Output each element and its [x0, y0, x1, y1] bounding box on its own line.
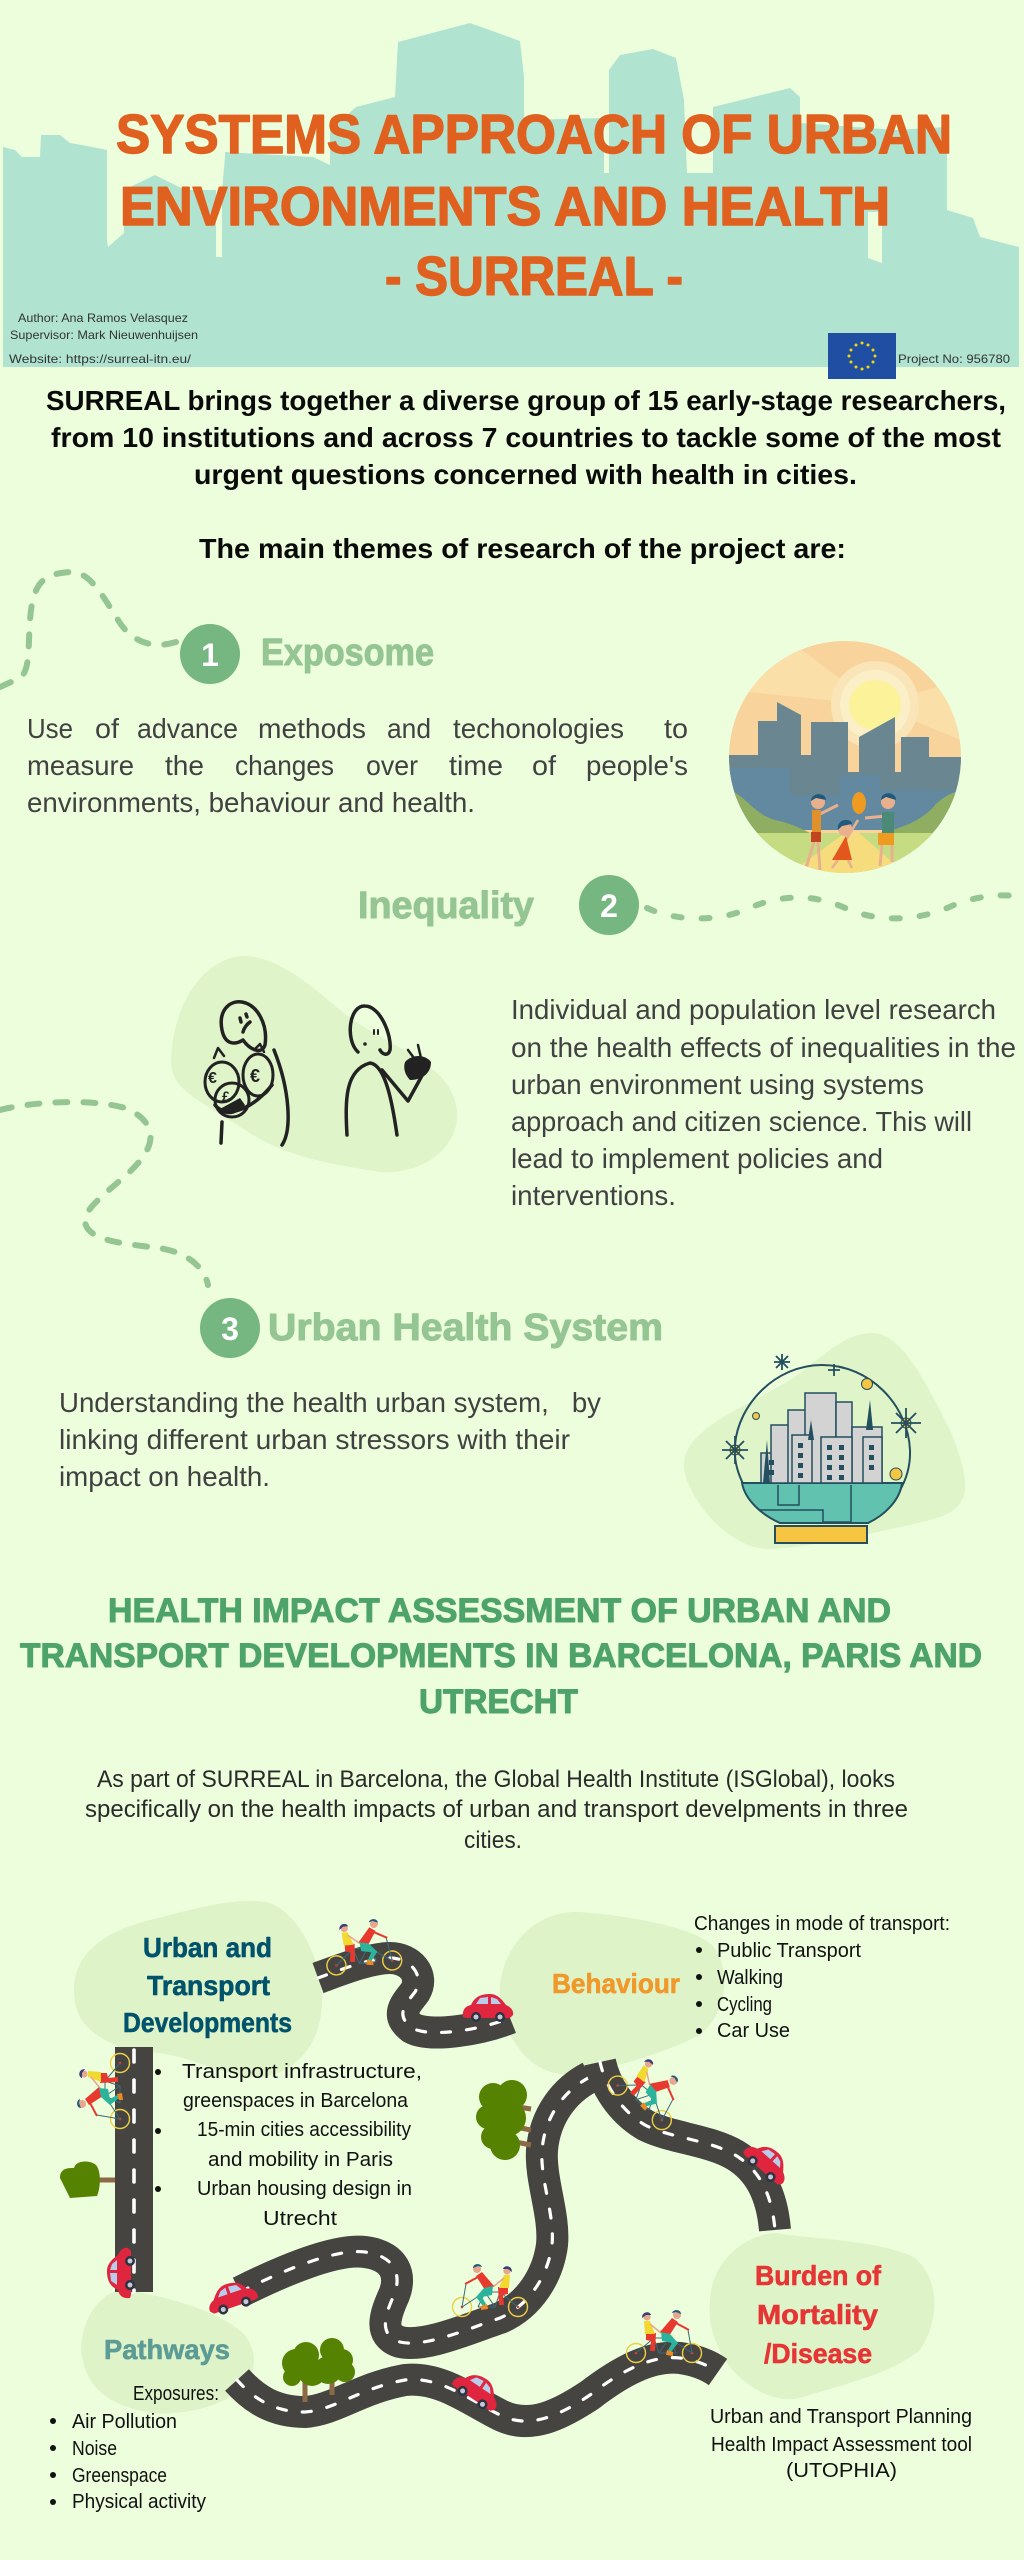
urban health description: linking different urban stressors with their: [59, 1424, 570, 1455]
list: exposures: Exposures:: [133, 2383, 219, 2405]
exposome description: [27, 713, 688, 818]
skyline silhouette: [3, 23, 1019, 367]
node label: urban and transport developments: Urban and: [143, 1932, 272, 1963]
exposome description: environments, behaviour and health.: [27, 787, 475, 818]
node blob: urban and transport developments: [74, 1901, 322, 2077]
list: exposures: [50, 2383, 219, 2513]
caption: UTOPHIA tool: [710, 2406, 972, 2482]
caption: UTOPHIA tool: Urban and Transport Planning: [710, 2406, 972, 2428]
node blob: behaviour: [500, 1912, 724, 2075]
list: developments: greenspaces in Barcelona: [183, 2090, 409, 2112]
dashed connector to theme 1: [0, 572, 176, 687]
inequality description: Individual and population level research: [511, 994, 996, 1025]
author credits: Supervisor: Mark Nieuwenhuijsen: [10, 328, 198, 342]
title: SYSTEMS APPROACH OF URBAN: [116, 103, 952, 165]
dashed connector to theme 3: [0, 1102, 208, 1285]
number badge 3: [200, 1298, 260, 1358]
list: exposures: Greenspace: [72, 2465, 167, 2487]
inequality description: urban environment using systems: [511, 1069, 924, 1100]
list: modes of transport: Car Use: [717, 2020, 790, 2042]
exposome description: the: [165, 750, 204, 781]
node label: burden of mortality / disease: /Disease: [764, 2338, 872, 2369]
exposome description: to: [664, 713, 688, 744]
illustration: person with many money bags: [205, 1002, 288, 1145]
heading: inequality: Inequality: [358, 885, 534, 927]
icon: car right road: [740, 2135, 796, 2190]
node label: burden of mortality / disease: Burden of: [755, 2260, 882, 2291]
illustration: person with many money bags: €: [208, 1070, 217, 1087]
heading: health impact assessment: HEALTH IMPACT ASSESSMENT OF URBAN AND: [108, 1592, 891, 1630]
intro text block: urgent questions concerned with health in cities.: [194, 459, 857, 490]
exposome description: changes: [235, 750, 334, 781]
illustration: city in a snow globe: [722, 1354, 921, 1543]
icon: cyclists bottom road: [626, 2310, 702, 2362]
node blob: pathways: [81, 2290, 254, 2414]
heading: urban health system: Urban Health System: [268, 1307, 663, 1349]
node label: urban and transport developments: Developments: [123, 2007, 292, 2038]
author credits: Website: https://surreal-itn.eu/: [9, 352, 192, 366]
icon: large tree by central road: [476, 2080, 531, 2160]
urban health description: [59, 1387, 601, 1492]
exposome description: of: [95, 713, 119, 744]
list: exposures: Physical activity: [72, 2491, 206, 2513]
urban health description: impact on health.: [59, 1461, 270, 1492]
icon: car central road: [203, 2276, 260, 2318]
heading: exposome: Exposome: [261, 632, 434, 674]
icon: tree left of vertical road: [60, 2162, 115, 2198]
section description: cities.: [464, 1827, 522, 1854]
exposome description: people's: [586, 750, 688, 781]
inequality description: [511, 994, 1016, 1211]
list: developments: and mobility in Paris: [208, 2149, 393, 2171]
panel: road map diagram: [50, 1901, 972, 2513]
background blob: [171, 956, 457, 1172]
title: - SURREAL -: [385, 245, 683, 307]
list: developments: [155, 2061, 422, 2230]
panel: header with city skyline: [3, 23, 1019, 379]
project number: Project No: 956780: [898, 352, 1010, 366]
node label: urban and transport developments: [123, 1932, 292, 2038]
intro text block: [46, 385, 1006, 490]
number badge 2: [579, 875, 639, 935]
illustration: children playing in city park: [729, 641, 961, 873]
title: ENVIRONMENTS AND HEALTH: [120, 175, 890, 237]
exposome description: over: [366, 750, 418, 781]
list: modes of transport: Changes in mode of transport:: [694, 1913, 950, 1935]
intro text block: SURREAL brings together a diverse group of 15 early-stage researchers,: [46, 385, 1006, 416]
panel: theme 3 urban health system: [59, 1298, 965, 1549]
icon: EU flag: [828, 333, 896, 379]
icon: two trees near pathways: [282, 2338, 355, 2402]
list: developments: Utrecht: [263, 2208, 338, 2230]
list: developments: Transport infrastructure,: [182, 2061, 422, 2083]
list: exposures: Air Pollution: [72, 2411, 177, 2433]
list: modes of transport: Public Transport: [717, 1940, 861, 1962]
exposome description: of: [532, 750, 556, 781]
inequality description: lead to implement policies and: [511, 1143, 883, 1174]
exposome description: methods: [258, 713, 366, 744]
icon: car bottom road: [449, 2364, 506, 2416]
author credits: [9, 311, 198, 366]
icon: car top road: [463, 1994, 513, 2022]
list: developments: Urban housing design in: [197, 2178, 412, 2200]
panel: theme 2 inequality: [171, 875, 1024, 1211]
road: pathways to burden: [237, 2358, 718, 2421]
road: developments to pathways: [115, 2047, 153, 2292]
list: developments: 15-min cities accessibility: [197, 2119, 411, 2141]
inequality description: approach and citizen science. This will: [511, 1106, 972, 1137]
number badge 1: [180, 624, 240, 684]
exposome description: advance: [137, 713, 238, 744]
list: exposures: Noise: [72, 2438, 117, 2460]
node blob: burden: [710, 2233, 934, 2399]
road: pathways to behaviour: [240, 2077, 590, 2343]
heading: health impact assessment: UTRECHT: [419, 1683, 578, 1721]
background blob: [684, 1333, 965, 1549]
caption: UTOPHIA tool: (UTOPHIA): [786, 2460, 897, 2482]
node label: behaviour: Behaviour: [552, 1968, 680, 1999]
exposome description: Use: [27, 713, 73, 744]
intro text block: from 10 institutions and across 7 countries to tackle some of the most: [51, 422, 1001, 453]
road: developments to behaviour: [318, 1958, 510, 2033]
node label: burden of mortality / disease: Mortality: [757, 2299, 878, 2330]
illustration: person with many money bags: £: [222, 1088, 230, 1104]
node label: burden of mortality / disease: [755, 2260, 882, 2369]
section description: specifically on the health impacts of urban and transport develpments in three: [85, 1796, 908, 1823]
node label: urban and transport developments: Transport: [147, 1970, 270, 2001]
list: modes of transport: Walking: [717, 1967, 783, 1989]
inequality description: on the health effects of inequalities in the: [511, 1032, 1016, 1063]
icon: car vertical road: [107, 2248, 135, 2298]
section description: [85, 1766, 908, 1854]
heading: main themes: The main themes of research of the project are:: [199, 533, 846, 564]
inequality description: interventions.: [511, 1180, 676, 1211]
road: behaviour to burden: [600, 2062, 775, 2230]
caption: UTOPHIA tool: Health Impact Assessment tool: [711, 2434, 972, 2456]
illustration: person with many money bags: €: [250, 1066, 260, 1086]
exposome description: techonologies: [453, 713, 624, 744]
number badge 1: 1: [201, 637, 219, 673]
icon: cyclists behaviour road: [604, 2046, 696, 2133]
node label: pathways: Pathways: [104, 2334, 230, 2365]
section description: As part of SURREAL in Barcelona, the Global Health Institute (ISGlobal), looks: [97, 1766, 895, 1793]
urban health description: Understanding the health urban system, by: [59, 1387, 601, 1418]
list: modes of transport: [694, 1913, 950, 2042]
heading: health impact assessment: TRANSPORT DEVELOPMENTS IN BARCELONA, PARIS AND: [20, 1637, 982, 1675]
icon: cyclists vertical road: [77, 2054, 130, 2128]
icon: cyclists top road: [323, 1917, 402, 1976]
illustration: person with one small money bag: [346, 1006, 431, 1135]
list: modes of transport: Cycling: [717, 1994, 772, 2016]
number badge 3: 3: [221, 1311, 239, 1347]
panel: theme 1 exposome: [27, 624, 961, 873]
icon: cyclists central road: [452, 2264, 528, 2316]
exposome description: and: [387, 713, 431, 744]
heading: health impact assessment: [20, 1592, 982, 1721]
author credits: Author: Ana Ramos Velasquez: [18, 311, 188, 325]
dashed connector from theme 2: [647, 895, 1024, 918]
exposome description: time: [449, 750, 503, 781]
exposome description: measure: [27, 750, 134, 781]
number badge 2: 2: [600, 888, 618, 924]
title: [116, 103, 952, 307]
